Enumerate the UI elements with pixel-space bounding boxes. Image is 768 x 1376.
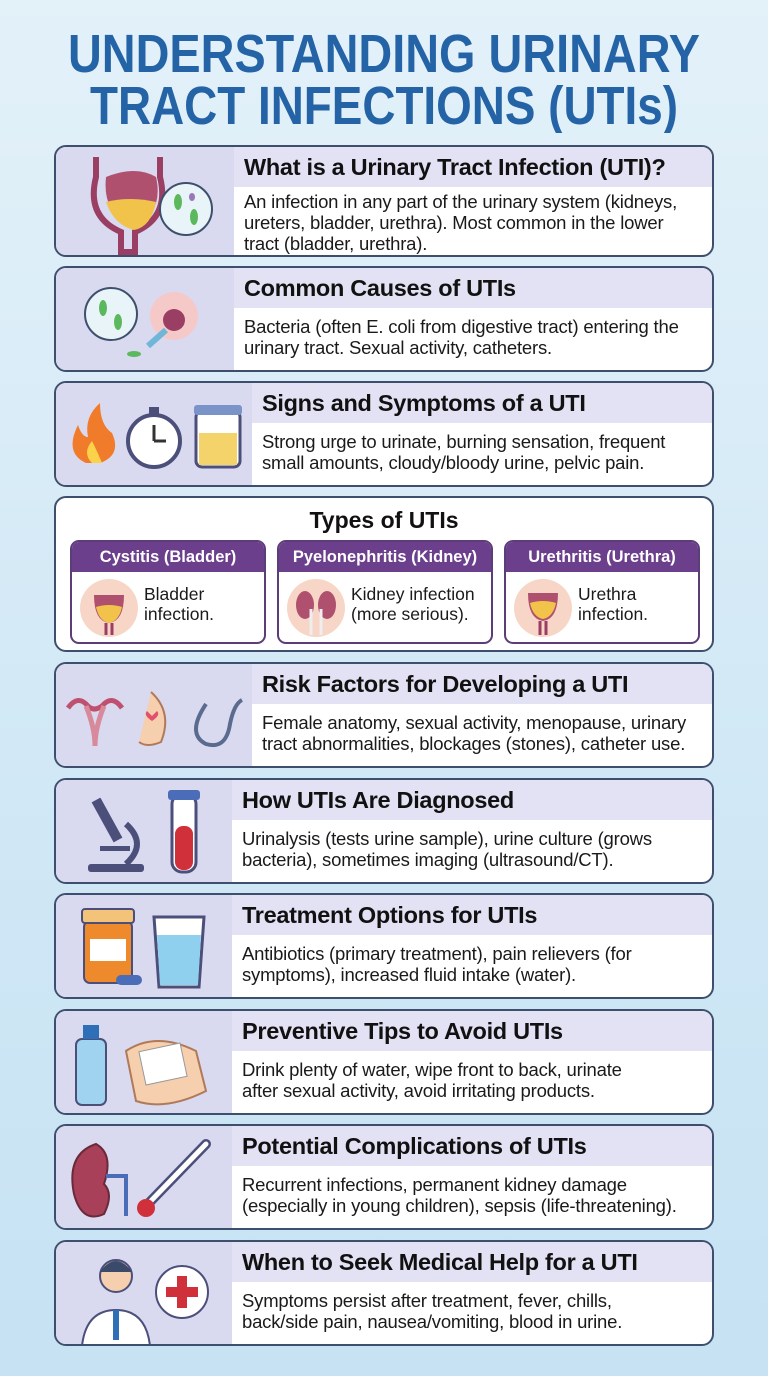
text block: tract abnormalities, blockages (stones), catheter use. — [262, 733, 685, 754]
text block — [262, 431, 666, 473]
heading: Signs and Symptoms of a UTI — [262, 390, 586, 416]
heading: When to Seek Medical Help for a UTI — [242, 1249, 638, 1275]
heading: Potential Complications of UTIs — [242, 1133, 587, 1159]
text block: Female anatomy, sexual activity, menopause, urinary — [262, 712, 686, 733]
icon: water bottle and hands with wipe — [56, 1011, 232, 1113]
heading — [232, 1126, 712, 1166]
heading — [232, 780, 712, 820]
type: pyelonephritis: (more serious). — [351, 604, 469, 624]
type: cystitis: Bladder — [144, 584, 204, 604]
heading — [232, 1242, 712, 1282]
panel: risk factors — [54, 662, 714, 768]
icon: microscope and test tube — [56, 780, 232, 882]
panel: types of UTIs — [54, 496, 714, 652]
text block: Drink plenty of water, wipe front to back, urinate — [242, 1059, 622, 1080]
title — [68, 24, 700, 133]
text block — [244, 316, 679, 358]
text block: small amounts, cloudy/bloody urine, pelvic pain. — [262, 452, 644, 473]
type: urethritis — [504, 540, 700, 644]
text block — [244, 191, 677, 254]
icon: bacteria entering — [56, 268, 234, 370]
type: urethritis: infection. — [578, 604, 648, 624]
text block: tract (bladder, urethra). — [244, 233, 427, 254]
heading — [232, 895, 712, 935]
type: pyelonephritis — [277, 540, 493, 644]
type: pyelonephritis: Pyelonephritis (Kidney) — [293, 548, 477, 566]
text block: Bacteria (often E. coli from digestive tract) entering the — [244, 316, 679, 337]
heading — [234, 147, 712, 187]
type: cystitis — [70, 540, 266, 644]
heading — [232, 1011, 712, 1051]
panel: treatment — [54, 893, 714, 999]
text block: (especially in young children), sepsis (life-threatening). — [242, 1195, 677, 1216]
text block: Recurrent infections, permanent kidney damage — [242, 1174, 627, 1195]
text block — [242, 1290, 622, 1332]
text block — [242, 828, 652, 870]
heading — [234, 268, 712, 308]
panel: what is a UTI — [54, 145, 714, 257]
heading: Types of UTIs — [309, 507, 459, 533]
text block — [242, 1174, 677, 1216]
type: urethritis: Urethra — [578, 584, 636, 604]
icon: bladder with bacteria — [56, 147, 234, 255]
text block — [242, 1059, 622, 1101]
heading: Risk Factors for Developing a UTI — [262, 671, 628, 697]
text block: Urinalysis (tests urine sample), urine culture (grows — [242, 828, 652, 849]
heading — [252, 383, 712, 423]
text block: urinary tract. Sexual activity, catheters. — [244, 337, 552, 358]
icon: anatomy, pregnancy, catheter — [56, 664, 252, 766]
text block: Antibiotics (primary treatment), pain relievers (for — [242, 943, 632, 964]
heading: Treatment Options for UTIs — [242, 902, 537, 928]
type: cystitis: Cystitis (Bladder) — [100, 548, 236, 566]
heading: What is a Urinary Tract Infection (UTI)? — [244, 154, 666, 180]
icon: doctor and red cross — [56, 1242, 232, 1344]
text block — [262, 712, 686, 754]
heading: Common Causes of UTIs — [244, 275, 516, 301]
text block: Strong urge to urinate, burning sensation, frequent — [262, 431, 665, 452]
heading: How UTIs Are Diagnosed — [242, 787, 514, 813]
text block: after sexual activity, avoid irritating products. — [242, 1080, 595, 1101]
text block: An infection in any part of the urinary system (kidneys, — [244, 191, 677, 212]
text block — [242, 943, 632, 985]
heading: Preventive Tips to Avoid UTIs — [242, 1018, 563, 1044]
type: pyelonephritis: Kidney infection — [351, 584, 475, 604]
heading — [252, 664, 712, 704]
text block: symptoms), increased fluid intake (water). — [242, 964, 576, 985]
icon: kidney and thermometer — [56, 1126, 232, 1228]
panel: complications — [54, 1124, 714, 1230]
icon: pill bottle and water glass — [56, 895, 232, 997]
icon: fire, stopwatch, cup — [56, 383, 252, 485]
text block: ureters, bladder, urethra). Most common in the lower — [244, 212, 663, 233]
panel: symptoms — [54, 381, 714, 487]
text block: bacteria), sometimes imaging (ultrasound/CT). — [242, 849, 613, 870]
type: urethritis: Urethritis (Urethra) — [528, 548, 676, 566]
panel: diagnosis — [54, 778, 714, 884]
text block: Symptoms persist after treatment, fever, chills, — [242, 1290, 612, 1311]
panel: when to seek help — [54, 1240, 714, 1346]
text block: back/side pain, nausea/vomiting, blood in urine. — [242, 1311, 622, 1332]
type: cystitis: infection. — [144, 604, 214, 624]
panel: causes — [54, 266, 714, 372]
panel: prevention — [54, 1009, 714, 1115]
